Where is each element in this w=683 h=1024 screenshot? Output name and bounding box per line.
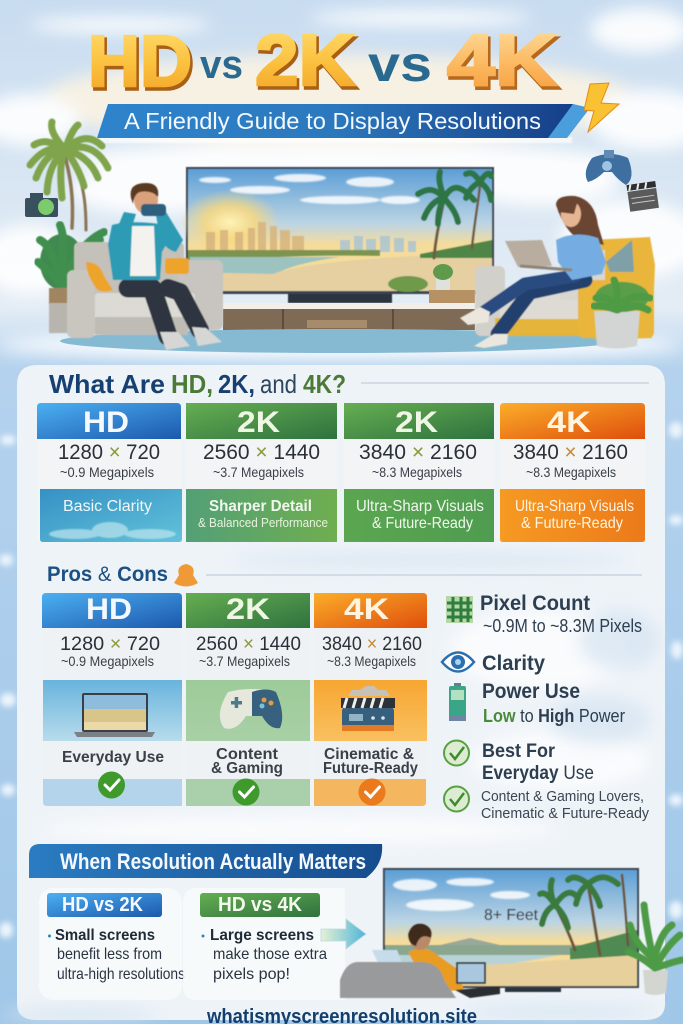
left sofa and man with binoculars <box>49 183 223 350</box>
arrow <box>321 919 366 949</box>
card: HD overview: 1280 × 720 <box>58 441 160 464</box>
comparison column: 2K: 2560 × 1440 <box>196 634 301 655</box>
panel: HD vs 2K <box>39 888 185 1000</box>
icon: orange check <box>358 778 386 806</box>
panel: HD vs 4K: Large screens <box>210 927 314 944</box>
heading: What Are HD, 2K, and 4K?: 2K, <box>218 369 255 399</box>
title: HD vs 2K vs 4K: 2K <box>255 21 355 101</box>
main content panel <box>0 365 665 1023</box>
icon: lightning bolt <box>584 83 619 132</box>
comparison column: 2K: Content <box>216 746 278 763</box>
heading: Pros & Cons: Pros & Cons <box>47 563 168 586</box>
metrics: pixel count <box>446 592 642 636</box>
comparison column: 2K: & Gaming <box>211 760 283 777</box>
title: HD vs 2K vs 4K: 4K <box>447 21 557 101</box>
heading: What Are HD, 2K, and 4K?: What Are <box>49 369 165 399</box>
television with beach city scene <box>180 167 494 303</box>
icon: camera <box>25 193 58 217</box>
comparison column: 4K: 4K <box>344 593 389 626</box>
card: 2K ultra overview: 3840 × 2160 <box>359 441 477 464</box>
card: 2K ultra overview: Ultra-Sharp Visuals <box>356 498 484 515</box>
card: HD overview: ~0.9 Megapixels <box>60 464 154 480</box>
metrics: best for: Everyday Use <box>482 763 594 784</box>
icon: laptop <box>74 693 155 737</box>
heading: What Are HD, 2K, and 4K?: 4K? <box>303 369 346 399</box>
card: 4K overview: 3840 × 2160 <box>513 441 628 464</box>
metrics: clarity <box>442 652 545 675</box>
metrics: best for <box>444 740 649 822</box>
panel: HD vs 2K: benefit less from <box>57 946 162 963</box>
panel: HD vs 4K: pixels pop! <box>213 966 290 983</box>
card: HD overview: Basic Clarity <box>63 498 152 515</box>
panel: HD vs 4K: make those extra <box>213 946 327 963</box>
heading: What Are HD, 2K, and 4K?: and <box>260 369 297 399</box>
heading: Pros & Cons <box>47 563 642 586</box>
title: HD vs 2K vs 4K: 4K <box>449 24 559 104</box>
palm tree left <box>30 122 108 230</box>
card: 2K ultra overview: & Future-Ready <box>372 515 473 532</box>
heading: What Are HD, 2K, and 4K? <box>49 369 649 399</box>
panel: HD vs 2K: HD vs 2K <box>62 894 144 916</box>
card: 4K overview <box>500 403 645 542</box>
card: 2K overview: ~3.7 Megapixels <box>213 464 304 480</box>
icon: game controller <box>220 689 282 729</box>
card: 2K overview: 2560 × 1440 <box>203 441 320 464</box>
rug <box>60 329 616 353</box>
panel: HD vs 2K: Small screens <box>55 927 155 944</box>
banner: When Resolution Actually Matters <box>29 844 382 878</box>
subtitle ribbon <box>92 104 590 143</box>
metrics: power use: Low to High Power <box>483 706 625 726</box>
card: 2K overview: 2K <box>237 406 280 439</box>
card: 2K overview: Sharper Detail <box>209 498 312 515</box>
card: 2K overview <box>186 403 337 542</box>
title: HD vs 2K vs 4K <box>88 21 559 105</box>
card: HD overview <box>37 403 182 542</box>
subtitle ribbon: A Friendly Guide to Display Resolutions <box>124 108 541 134</box>
panel: HD vs 2K: ultra-high resolutions <box>57 966 185 983</box>
icon: game controller <box>586 150 632 185</box>
metrics: pixel count: ~0.9M to ~8.3M Pixels <box>483 616 642 636</box>
comparison column: HD: HD <box>86 593 132 626</box>
title: HD vs 2K vs 4K: vs <box>200 43 243 87</box>
banner: When Resolution Actually Matters: When Resolution Actually Matters <box>60 849 366 874</box>
comparison column: HD: ~0.9 Megapixels <box>61 653 154 669</box>
icon: green check <box>232 778 260 806</box>
metrics: power use <box>449 680 625 726</box>
card: 2K ultra overview: ~8.3 Megapixels <box>372 464 462 480</box>
metrics: pixel count: Pixel Count <box>480 592 590 615</box>
small plant on stand <box>433 264 453 290</box>
card: 4K overview: ~8.3 Megapixels <box>526 464 616 480</box>
TV scene with viewer <box>340 868 682 998</box>
potted plant right <box>594 280 650 348</box>
icon: check outline <box>444 740 469 766</box>
heading: What Are HD, 2K, and 4K?: HD, <box>171 369 213 399</box>
right sofa and woman with laptop <box>460 196 655 348</box>
card: 2K ultra overview: 2K <box>395 406 438 439</box>
comparison column: 4K: Cinematic & <box>324 746 414 763</box>
comparison column: HD: Everyday Use <box>62 749 164 766</box>
title: HD vs 2K vs 4K: HD <box>88 22 192 102</box>
metrics: best for: Cinematic & Future-Ready <box>481 805 649 822</box>
card: 2K ultra overview <box>344 403 494 542</box>
comparison column: 4K <box>314 593 427 806</box>
comparison column: 4K: Future-Ready <box>323 760 418 777</box>
comparison column: HD: 1280 × 720 <box>60 634 160 655</box>
metrics: power use: Power Use <box>482 680 580 703</box>
comparison column: HD <box>42 593 182 806</box>
title: HD vs 2K vs 4K: vs <box>368 36 432 92</box>
comparison column: 4K: 3840 × 2160 <box>322 634 422 655</box>
panel: HD vs 4K <box>183 888 345 1000</box>
icon: clapperboard <box>341 686 395 731</box>
card: 4K overview: Ultra-Sharp Visuals <box>515 498 634 515</box>
comparison column: 2K: ~3.7 Megapixels <box>199 653 290 669</box>
card: 4K overview: 4K <box>547 406 591 439</box>
TV scene with viewer: 8+ Feet <box>484 907 539 924</box>
card: 2K overview: & Balanced Performance <box>198 515 328 530</box>
comparison column: 2K: 2K <box>226 593 270 626</box>
metrics: best for: Content & Gaming Lovers, <box>481 788 644 805</box>
icon: check outline <box>444 786 469 812</box>
comparison column: 4K: ~8.3 Megapixels <box>327 653 416 669</box>
viewer on sofa with laptop <box>340 923 500 998</box>
title: HD vs 2K vs 4K: HD <box>90 25 194 105</box>
panel: HD vs 4K: HD vs 4K <box>218 894 303 916</box>
title: HD vs 2K vs 4K: 2K <box>257 24 357 104</box>
metrics: best for: Best For <box>482 741 556 762</box>
plant behind left sofa <box>38 225 104 304</box>
metrics: clarity: Clarity <box>482 652 545 675</box>
potted plant <box>628 905 682 995</box>
card: HD overview: HD <box>83 406 129 439</box>
comparison column: 2K <box>186 593 310 806</box>
card: 4K overview: & Future-Ready <box>521 515 623 532</box>
icon: clapperboard <box>626 181 659 212</box>
icon: green check <box>98 772 125 798</box>
TV stand <box>223 290 475 330</box>
